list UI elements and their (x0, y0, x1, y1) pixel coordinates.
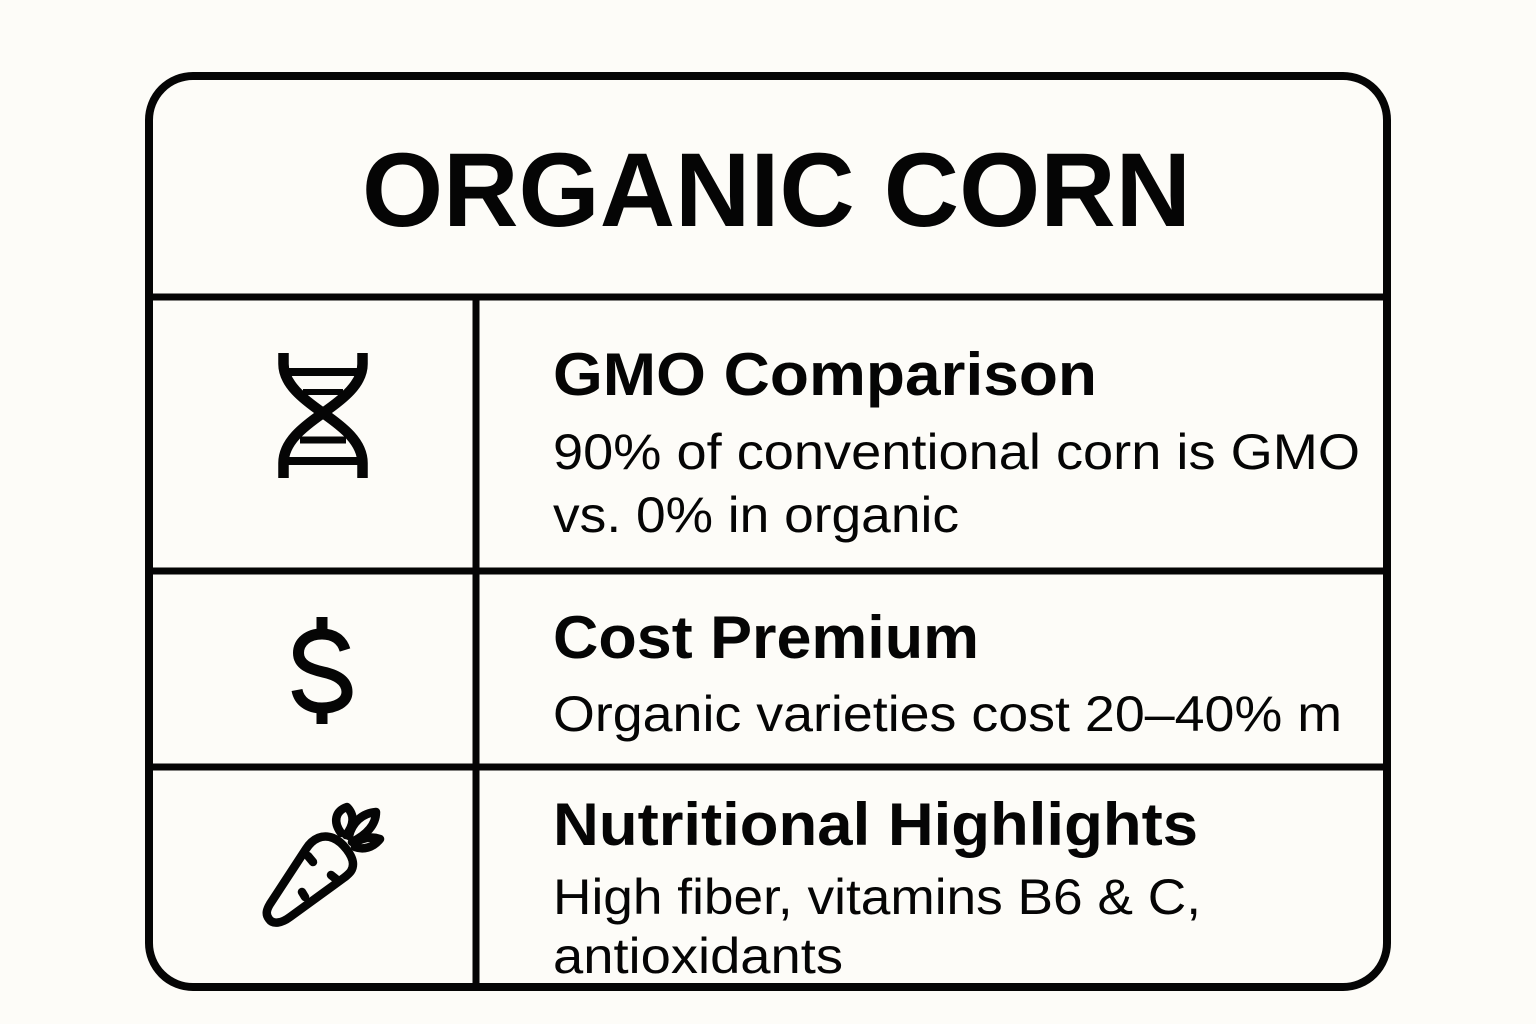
icon: dollar sign (297, 617, 347, 724)
text: gmo detail: 90% of conventional corn is GMO (553, 424, 1360, 480)
heading: gmo comparison: GMO Comparison (553, 341, 1097, 408)
text: cost detail: Organic varieties cost 20–40% m (553, 686, 1342, 742)
panel: organic corn table (149, 76, 1387, 987)
row 2: cost premium (553, 604, 1342, 742)
row 3: nutritional highlights (553, 791, 1215, 984)
icon: carrot (267, 807, 380, 923)
icon: dna helix (284, 353, 362, 478)
title: ORGANIC CORN (362, 132, 1191, 249)
text: nutrition detail: High fiber, vitamins B6 & C, (553, 869, 1201, 925)
row 1: gmo comparison (553, 341, 1374, 543)
text: gmo detail: vs. 0% in organic (553, 487, 959, 543)
heading: cost premium: Cost Premium (553, 604, 979, 671)
text: nutrition detail: antioxidants (553, 928, 843, 984)
heading: nutritional highlights: Nutritional Highlights (553, 791, 1198, 858)
